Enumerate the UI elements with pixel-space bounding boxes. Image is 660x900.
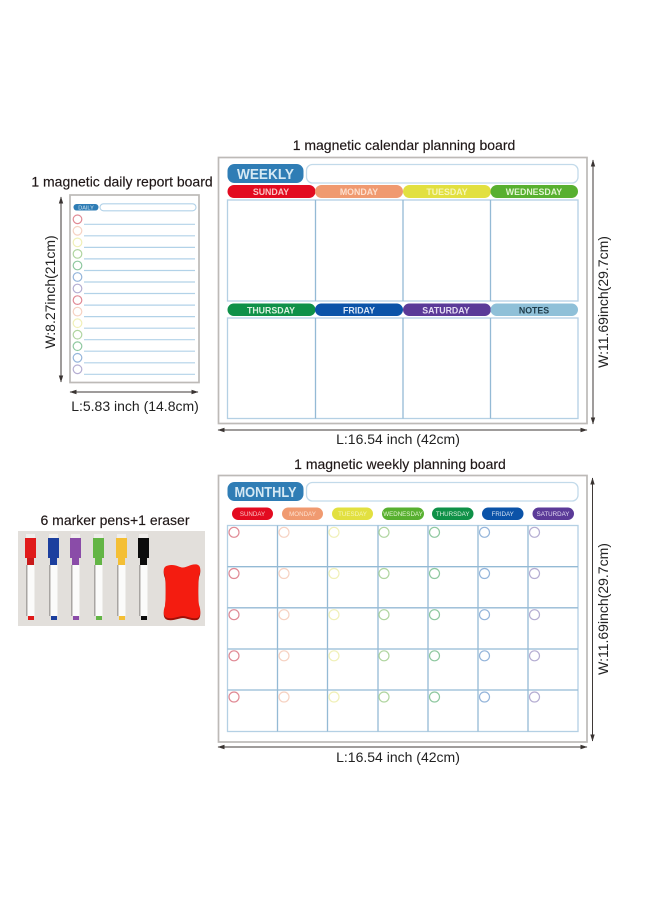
arrow: weekly length [218, 429, 587, 431]
weekly grid row 1 [228, 200, 578, 301]
weekly grid row 2 [228, 318, 578, 418]
daily label pill [74, 204, 98, 211]
monthly day pills: WEDNESDAY [383, 511, 423, 518]
marker: red [25, 534, 36, 620]
daily label pill: DAILY [78, 205, 94, 211]
dimension: monthly width: W:11.69inch(29.7cm) [595, 543, 611, 675]
panel: daily report board [70, 195, 199, 382]
day pills row 1: MONDAY [340, 187, 378, 197]
monthly day pills: SUNDAY [240, 511, 265, 518]
marker: blue [48, 534, 59, 620]
marker: black [138, 534, 149, 620]
arrow: daily length [70, 391, 198, 393]
monthly title field [306, 482, 578, 501]
weekly heading pill: WEEKLY [237, 166, 294, 183]
caption: weekly planning board: 1 magnetic weekly planning board [294, 456, 506, 472]
monthly day pills: FRIDAY [492, 511, 514, 518]
panel: monthly board [218, 476, 587, 742]
arrow: daily width [60, 197, 62, 382]
icon: red eraser [164, 564, 200, 620]
dimension: monthly length: L:16.54 inch (42cm) [336, 749, 460, 765]
day pills row 1: SUNDAY [253, 187, 289, 197]
monthly date circles [229, 527, 540, 702]
dimension: weekly length: L:16.54 inch (42cm) [336, 431, 460, 447]
arrow: monthly length [218, 746, 587, 748]
monthly calendar grid [228, 526, 578, 732]
day pills row 2: FRIDAY [343, 305, 375, 315]
marker: green [93, 534, 104, 620]
monthly day pills: TUESDAY [338, 511, 367, 518]
marker: yellow [116, 534, 127, 620]
day pills row 1: TUESDAY [426, 187, 468, 197]
arrow: monthly width [592, 478, 594, 741]
weekly title field [306, 164, 578, 183]
monthly day pills [232, 508, 574, 520]
marker: purple [70, 534, 81, 620]
caption: marker pens and eraser: 6 marker pens+1 eraser [40, 512, 190, 528]
dimension: daily width: W:8.27inch(21cm) [42, 235, 58, 349]
monthly heading pill: MONTHLY [234, 484, 296, 501]
daily rows: circles and lines [73, 215, 195, 374]
caption: daily report board: 1 magnetic daily report board [31, 174, 213, 190]
caption: calendar planning board: 1 magnetic calendar planning board [293, 137, 515, 153]
dimension: daily length: L:5.83 inch (14.8cm) [71, 398, 199, 414]
panel: marker pens and eraser photo [18, 531, 205, 626]
monthly day pills: THURSDAY [436, 511, 469, 518]
day pills row 2: THURSDAY [247, 305, 295, 315]
monthly day pills: SATURDAY [537, 511, 569, 518]
dimension: weekly width: W:11.69inch(29.7cm) [595, 236, 611, 368]
arrow: weekly width [592, 160, 594, 424]
day pills row 2 [228, 304, 578, 316]
day pills row 1 [228, 185, 578, 198]
panel: weekly board [218, 158, 587, 424]
daily title field [100, 204, 196, 211]
day pills row 1: WEDNESDAY [506, 187, 562, 197]
day pills row 2: SATURDAY [422, 305, 470, 315]
day pills row 2: NOTES [519, 305, 549, 315]
monthly day pills: MONDAY [289, 511, 316, 518]
